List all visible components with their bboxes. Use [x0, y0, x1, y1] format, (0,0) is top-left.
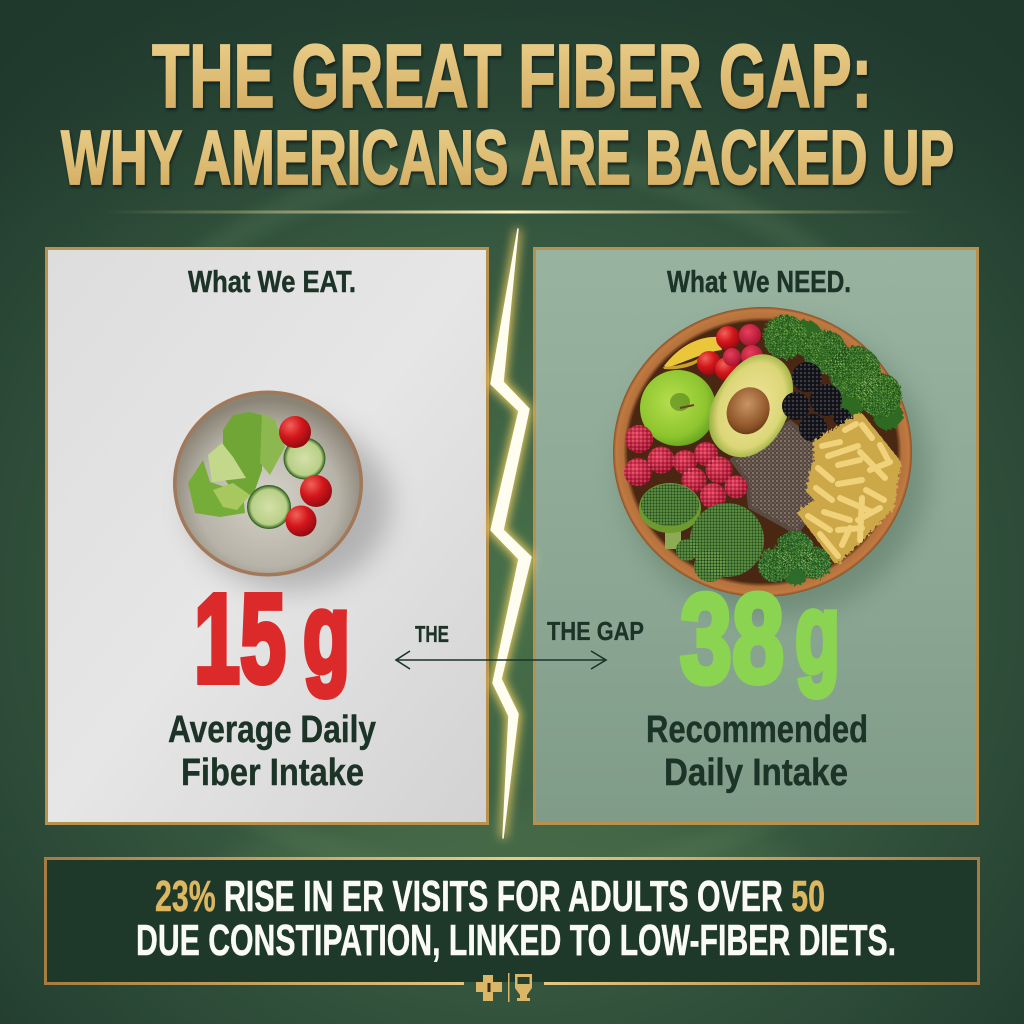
gap label right: THE GAP: [547, 616, 644, 646]
gap label left: THE: [415, 621, 449, 647]
pasta: [802, 417, 897, 560]
icon: full fiber bowl: [613, 307, 927, 615]
lettuce: [188, 412, 285, 517]
cherry tomatoes: [279, 416, 311, 448]
apple: [640, 370, 716, 446]
label: recommended daily intake: Recommended: [646, 709, 868, 751]
title: [61, 27, 954, 201]
label: recommended daily intake: Daily Intake: [664, 752, 848, 794]
icon: toilet: [508, 973, 532, 1002]
icon: medical cross: [476, 975, 502, 1001]
banana: [663, 337, 722, 369]
heading: what we eat: What We EAT.: [188, 264, 356, 299]
value unit: g: g: [795, 571, 840, 698]
cucumber slices: [284, 438, 326, 480]
callout text: [136, 872, 896, 965]
arrow: gap between intakes: [396, 651, 606, 669]
chia seeds: [732, 422, 820, 533]
callout text: 23% RISE IN ER VISITS FOR ADULTS OVER 50: [155, 872, 825, 921]
panel: what we eat: [46, 248, 488, 824]
heading: what we need: What We NEED.: [667, 264, 851, 299]
label: recommended daily intake: [646, 709, 868, 794]
blackberries: [782, 362, 851, 442]
raspberries: [624, 425, 748, 509]
title divider: [105, 210, 920, 214]
kale top right: [763, 315, 903, 430]
avocado: [696, 341, 807, 470]
icon: small salad bowl: [173, 390, 390, 590]
callout: er visits banner: [46, 858, 978, 984]
value: 38g: 38: [680, 568, 784, 709]
panel: what we need: [534, 248, 978, 824]
red fruits top: [697, 324, 763, 381]
label: average daily fiber intake: [168, 709, 376, 794]
label: average daily fiber intake: Average Daily: [168, 709, 376, 751]
label: average daily fiber intake: Fiber Intake: [181, 752, 364, 794]
lightning bolt divider: [491, 229, 531, 838]
value unit: g: g: [303, 571, 350, 698]
broccoli: [639, 483, 764, 582]
value: 15g: 15: [194, 568, 286, 709]
kale bottom: [758, 531, 831, 585]
